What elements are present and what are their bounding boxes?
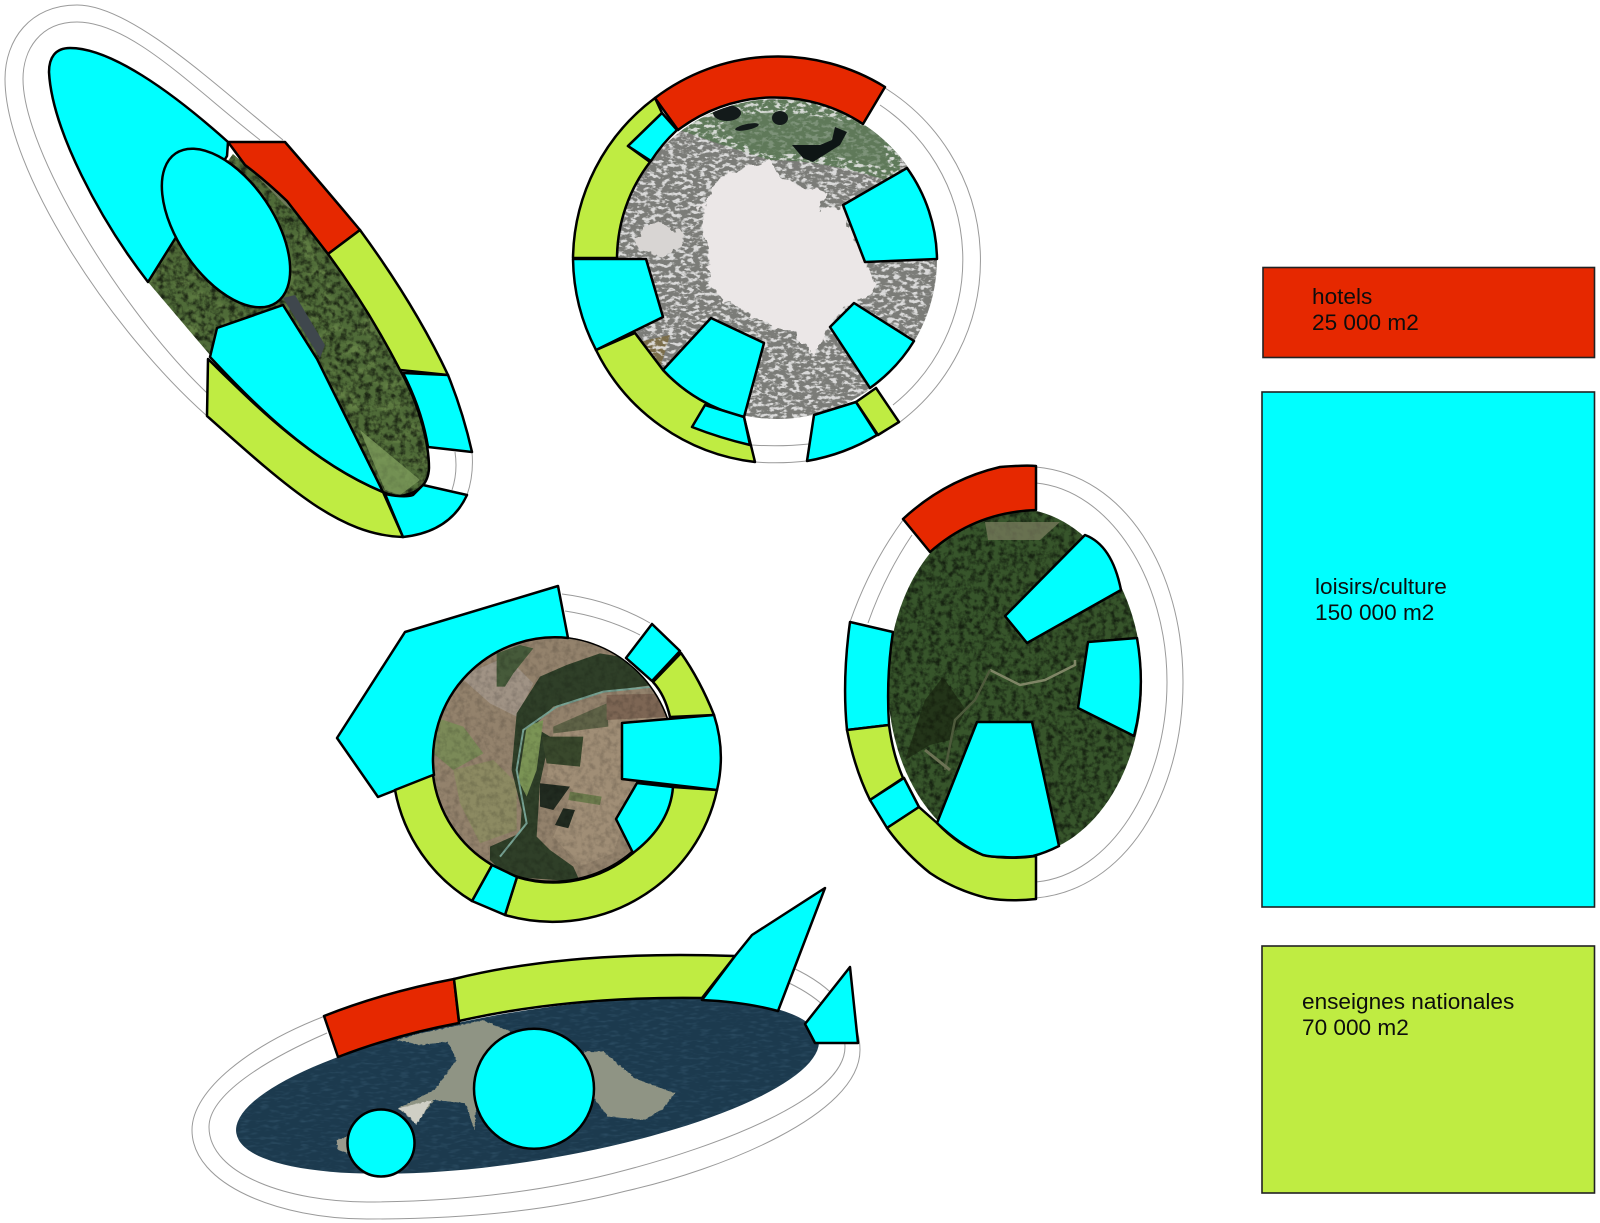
site 2 small leisure segment xyxy=(628,113,677,161)
site 3 leisure zone bottom xyxy=(937,722,1059,857)
site 5 retail segment xyxy=(454,955,735,1021)
site 4 small leisure segment top xyxy=(626,624,680,681)
site 1 leisure segment bottom xyxy=(385,485,467,537)
site 3 guide arcs xyxy=(850,467,1183,898)
site 3 leisure zone upper right xyxy=(1005,535,1121,643)
legend: leisure and culture xyxy=(1262,392,1594,907)
legend: hotels: 25 000 m2 xyxy=(1312,310,1419,335)
site 5 hotels segment xyxy=(324,979,459,1057)
site 4 retail segment right xyxy=(653,653,714,717)
site 1 outer leisure zone xyxy=(49,48,228,282)
site 4 aerial photo xyxy=(428,633,678,885)
legend: national retail xyxy=(1262,946,1594,1193)
site 3 retail segment lower xyxy=(887,807,1036,900)
site 5 small leisure wedge xyxy=(805,967,858,1043)
site 5 small leisure circle xyxy=(348,1110,414,1176)
site 2 guide arcs xyxy=(752,88,980,463)
site 1 central leisure ellipse xyxy=(136,127,316,329)
site 4: round ring around farmland aerial xyxy=(337,586,721,922)
site 2 retail segment lower xyxy=(596,333,755,462)
site 4 large leisure zone xyxy=(337,586,568,797)
site 3 small leisure segment xyxy=(870,778,919,828)
site 4 leisure segment right xyxy=(622,715,721,790)
site 1 hotels segment xyxy=(228,142,360,254)
site 1 guide contours xyxy=(5,5,472,495)
site 1: elongated diagonal ring xyxy=(5,5,472,537)
site 1 aerial end contour xyxy=(383,370,429,496)
site 4 guide arcs xyxy=(562,594,650,635)
site 3: oval ring around forest aerial xyxy=(845,466,1183,900)
site 2 hotels segment xyxy=(655,57,885,130)
site 1 retail segment upper right xyxy=(328,230,448,375)
site 4 retail segment lower xyxy=(505,787,717,922)
site 2: circular ring around snow aerial xyxy=(573,57,980,463)
site 2 retail segment left xyxy=(573,98,662,258)
site 3 leisure segment left xyxy=(845,622,893,730)
site 2 leisure segment bottom right xyxy=(807,402,877,461)
site 1 retail segment lower xyxy=(207,359,403,537)
site 5 aerial photo xyxy=(236,999,819,1174)
site 3 aerial photo xyxy=(885,505,1145,860)
site 2 small leisure segment bottom xyxy=(692,405,750,445)
site 3 hotels segment xyxy=(903,466,1036,552)
legend: leisure and culture: loisirs/culture xyxy=(1315,574,1447,599)
legend: hotels xyxy=(1263,268,1594,358)
legend: hotels: hotels xyxy=(1312,284,1372,309)
site 2 small retail segment xyxy=(856,388,899,435)
site 4 small leisure segment bottom xyxy=(472,865,517,915)
site 3 leisure zone right xyxy=(1078,638,1141,736)
legend: national retail: 70 000 m2 xyxy=(1302,1015,1409,1040)
legend xyxy=(1262,268,1594,1193)
site 1 leisure segment right xyxy=(403,373,472,452)
site 2 leisure segment lower right xyxy=(830,303,914,388)
site 5 large leisure circle xyxy=(474,1029,594,1149)
site 4 retail segment left xyxy=(395,775,492,901)
legend: national retail: enseignes nationales xyxy=(1302,989,1514,1014)
site 3 retail segment left xyxy=(847,725,903,800)
site 4 leisure segment lower right xyxy=(616,783,673,853)
site 1 leisure segment centre xyxy=(210,305,383,492)
site 5 guide contours xyxy=(192,968,860,1219)
site 2 leisure segment left xyxy=(573,259,663,350)
legend: leisure and culture: 150 000 m2 xyxy=(1315,600,1434,625)
site 1 aerial photo xyxy=(148,154,428,495)
site 5 tall leisure wedge xyxy=(702,888,825,1011)
site 2 aerial photo xyxy=(610,95,945,425)
site 2 leisure segment bottom left xyxy=(663,318,764,417)
site 5: flat ellipse around island aerial xyxy=(192,888,860,1219)
site 2 leisure segment upper right xyxy=(843,168,937,262)
